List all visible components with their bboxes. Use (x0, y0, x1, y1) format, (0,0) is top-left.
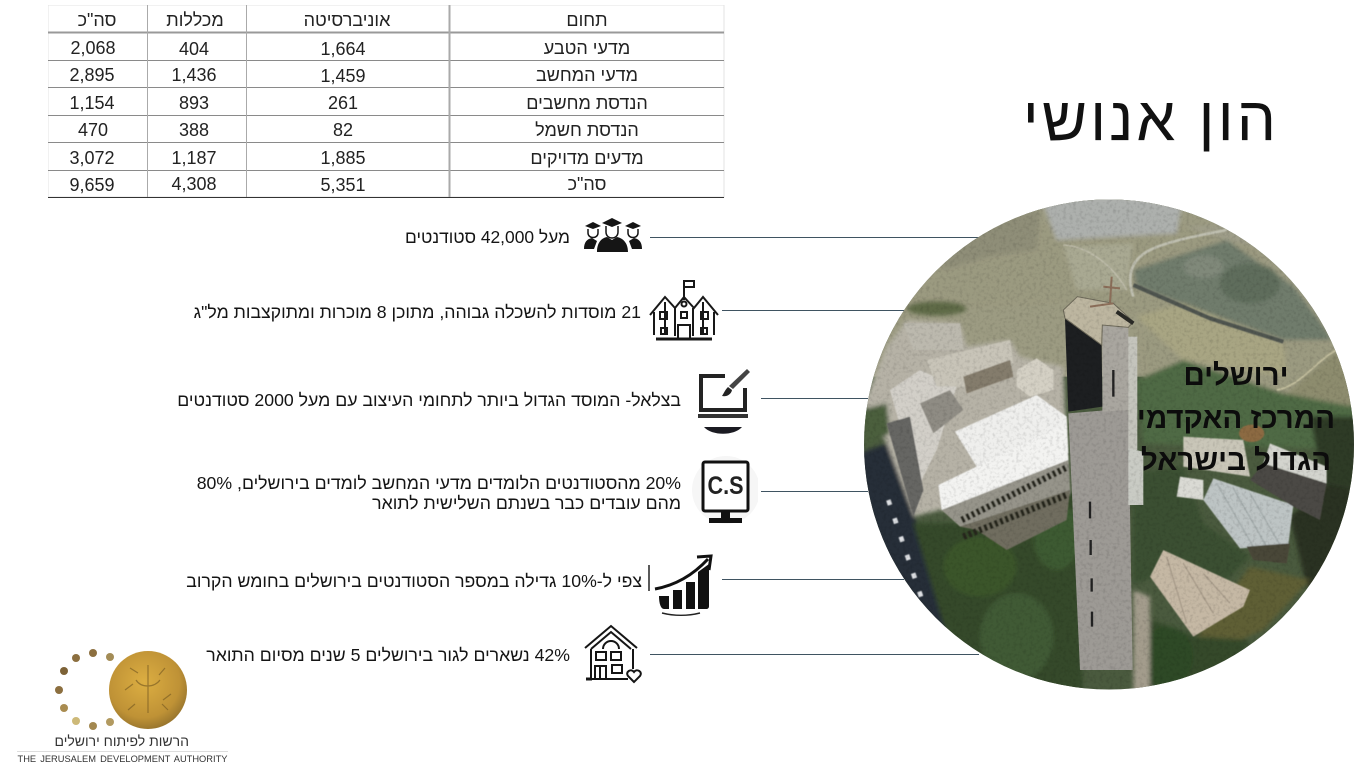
logo English name: THE JERUSALEM DEVELOPMENT AUTHORITY (18, 754, 227, 764)
table header row: תחום (566, 10, 608, 30)
photo caption: המרכז האקדמי (1137, 402, 1335, 434)
icon: design laptop (698, 369, 750, 434)
table row: natural sciences: 1,664 (320, 39, 366, 59)
table row: total: 9,659 (69, 175, 115, 195)
logo: Jerusalem Development Authority (17, 649, 228, 764)
icon: graduates (584, 218, 642, 252)
table row: computer engineering: 893 (179, 93, 209, 113)
icon: computer science monitor: C.S (708, 472, 744, 500)
table row: electrical engineering: 470 (78, 120, 108, 140)
tower shaft (1068, 408, 1133, 670)
table row: computer science: 1,459 (320, 66, 366, 86)
table row: computer engineering: הנדסת מחשבים (526, 93, 648, 113)
table row: computer science: 2,895 (69, 65, 115, 85)
table row: total: 4,308 (171, 174, 217, 194)
table header row (78, 10, 608, 30)
title: הון אנושי (1023, 85, 1279, 154)
table row: natural sciences: 2,068 (70, 38, 116, 58)
logo Hebrew name: הרשות לפיתוח ירושלים (55, 733, 189, 749)
table row: natural sciences: 404 (179, 39, 209, 59)
table row: exact sciences (69, 148, 644, 168)
table header row: מכללות (166, 10, 224, 30)
table row: electrical engineering: הנדסת חשמל (535, 120, 639, 140)
text: computer science students: מהם עובדים כבר בשנתם השלישית לתואר (372, 493, 681, 513)
icon: school (649, 280, 719, 340)
table row: exact sciences: 1,885 (320, 148, 366, 168)
table row: exact sciences: 1,187 (171, 148, 217, 168)
table row: computer engineering (69, 93, 648, 113)
text: computer science students (197, 473, 681, 513)
icon: computer science monitor (692, 456, 758, 524)
table row: electrical engineering: 388 (179, 120, 209, 140)
table row: computer science: מדעי המחשב (536, 65, 638, 85)
table row: computer science: 1,436 (171, 65, 217, 85)
photo caption: ירושלים (1184, 359, 1288, 392)
table row: exact sciences: מדעים מדויקים (530, 148, 644, 168)
table row: total: סה"כ (568, 174, 606, 194)
photo caption (1137, 359, 1335, 477)
table header row: אוניברסיטה (304, 10, 390, 30)
table row: natural sciences (70, 38, 630, 59)
table row: total (69, 174, 606, 195)
table row: electrical engineering (78, 120, 639, 140)
table row: computer engineering: 261 (328, 93, 358, 113)
table row: exact sciences: 3,072 (69, 148, 115, 168)
table row: computer engineering: 1,154 (69, 93, 115, 113)
text: graduates staying: 42% נשארים לגור בירושלים 5 שנים מסיום התואר (206, 645, 570, 665)
table row: natural sciences: מדעי הטבע (544, 38, 630, 58)
icon: house with heart (584, 624, 642, 684)
text: Bezalel: בצלאל- המוסד הגדול ביותר לתחומי העיצוב עם מעל 2000 סטודנטים (177, 390, 681, 410)
text: computer science students: 20% מהסטודנטים הלומדים מדעי המחשב לומדים בירושלים, 80% (197, 473, 681, 493)
table header row: סה"כ (78, 10, 116, 30)
table row: computer science (69, 65, 638, 86)
text: institutions: 21 מוסדות להשכלה גבוהה, מתוכן 8 מוכרות ומתוקצבות מל"ג (194, 302, 641, 322)
photo caption: הגדול בישראל (1141, 444, 1331, 477)
table: students by field (48, 5, 724, 198)
text: growth forecast: צפי ל-10% גדילה במספר הסטודנטים בירושלים בחומש הקרוב (186, 571, 642, 591)
photo circle: Jerusalem campus tower (864, 200, 1354, 690)
table row: total: 5,351 (320, 175, 366, 195)
table row: electrical engineering: 82 (333, 120, 353, 140)
text: students: מעל 42,000 סטודנטים (405, 227, 570, 247)
icon: growth chart (648, 554, 713, 616)
